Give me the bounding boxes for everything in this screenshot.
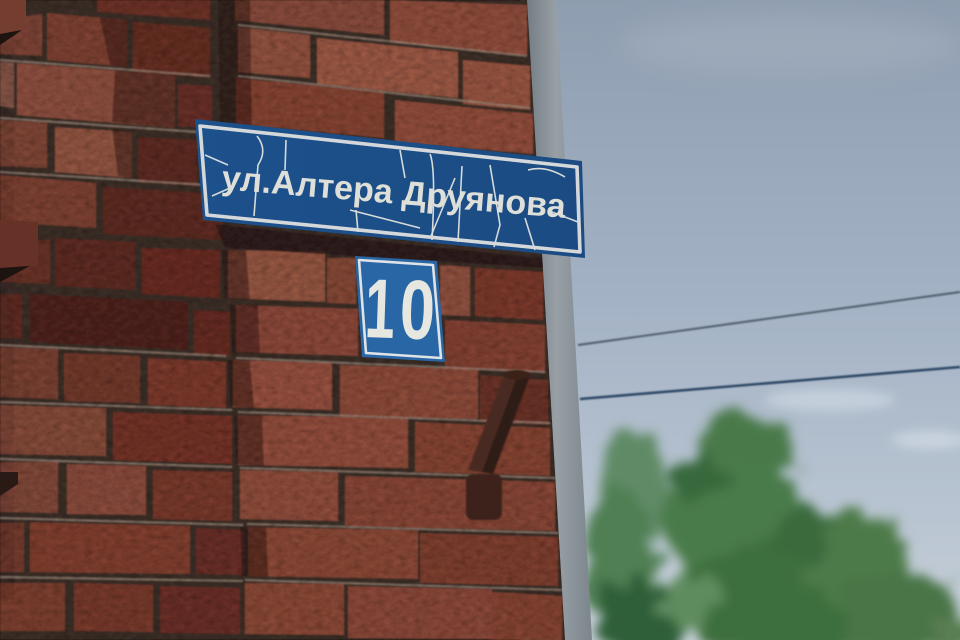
protruding bricks [0,0,38,496]
left wall bricks [0,0,243,634]
house number: 1 [363,261,397,356]
shadow below sign [215,224,560,268]
sky [520,0,960,640]
sign text: ул.Алтера Друянова [220,159,568,226]
house number: 0 [398,262,437,357]
mortar highlights [0,25,562,590]
drainpipe [527,0,592,640]
right wall bricks [228,0,562,640]
power lines [578,292,960,399]
paint cracks [205,136,578,250]
tree [582,412,960,640]
mortar [0,0,570,640]
street name sign [195,119,585,258]
cast shadows on bricks [0,0,268,600]
house number [363,261,437,357]
brick wall [0,0,570,640]
house number plate [355,256,445,362]
wall bracket pipe [466,370,530,520]
